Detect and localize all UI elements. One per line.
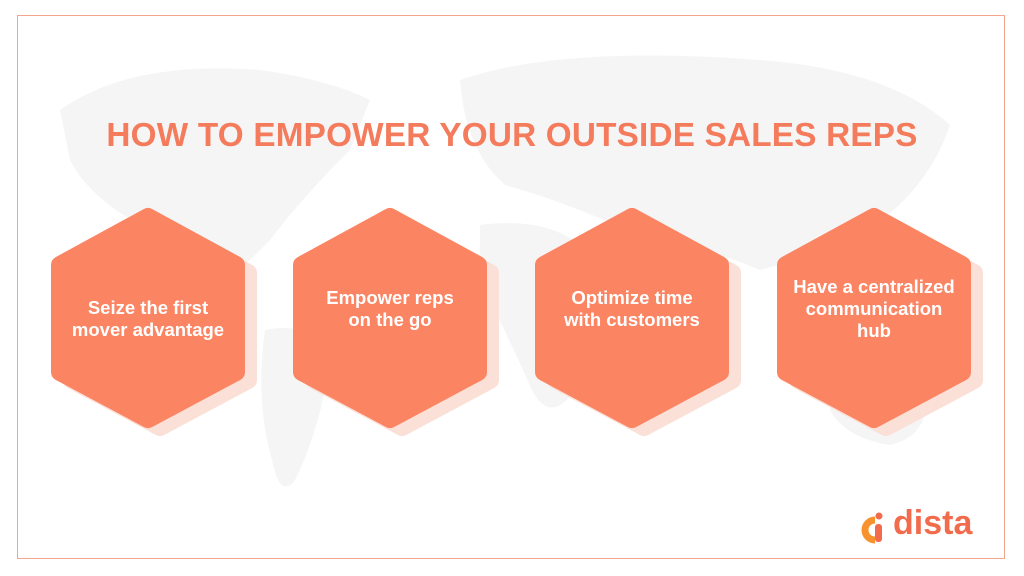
text <box>793 276 955 341</box>
text: mover advantage <box>72 319 224 340</box>
text: Seize the first <box>88 297 208 318</box>
hexagon 4 <box>777 208 983 436</box>
text: hub <box>857 320 891 341</box>
text: Empower reps <box>326 287 454 308</box>
text: Optimize time <box>571 287 693 308</box>
text: with customers <box>564 309 700 330</box>
text: communication <box>806 298 942 319</box>
hexagon 3 <box>535 208 741 436</box>
title: HOW TO EMPOWER YOUR OUTSIDE SALES REPS <box>106 117 918 154</box>
text: on the go <box>348 309 432 330</box>
text <box>564 287 700 330</box>
hexagon 2 <box>293 208 499 436</box>
text: Have a centralized <box>793 276 955 297</box>
logo: dista <box>862 504 973 544</box>
hexagon 1 <box>51 208 257 436</box>
logo: dista: dista <box>893 504 972 542</box>
text <box>326 287 454 330</box>
text <box>72 297 224 340</box>
